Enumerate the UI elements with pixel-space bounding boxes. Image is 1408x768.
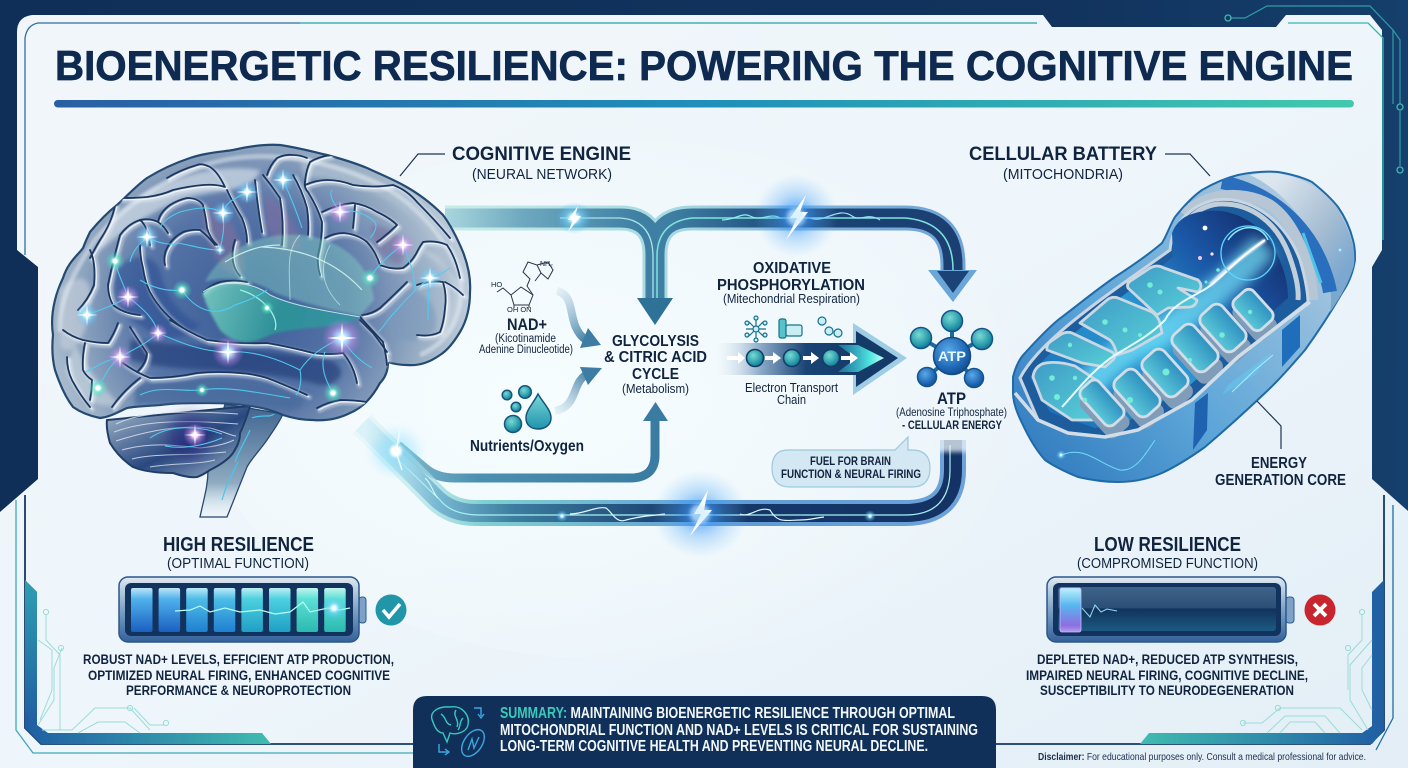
callout: fuel for brain: FUNCTION & NEURAL FIRING [781, 467, 921, 481]
cristae: side walls of fingers [1077, 293, 1280, 441]
title: BIOENERGETIC RESILIENCE: POWERING THE COGNITIVE ENGINE [55, 42, 1353, 89]
label: ATP: (Adenosine Triphosphate) [896, 405, 1007, 419]
label: ATP: ATP [937, 389, 966, 408]
icon: ATP molecule: ATP [938, 348, 966, 364]
label: electron transport chain: Chain [777, 393, 806, 407]
label: ATP [896, 389, 1007, 432]
label: oxidative phosphorylation: PHOSPHORYLATION [717, 277, 865, 294]
callout: cognitive engine: (NEURAL NETWORK) [472, 166, 612, 183]
cap band [1222, 182, 1330, 292]
inner rim highlight [60, 156, 461, 355]
mitochondrion [1013, 172, 1355, 482]
label: electron transport chain [745, 381, 838, 407]
cerebellum [107, 406, 250, 477]
text: low resilience effects: DEPLETED NAD+, REDUCED ATP SYNTHESIS, [1037, 652, 1298, 667]
callout: cognitive engine [400, 144, 631, 183]
arrow: electron transport chain [718, 323, 907, 395]
callout: fuel for brain [772, 437, 930, 487]
label: NAD+: NAD+ [507, 315, 547, 334]
text: low resilience effects [1026, 652, 1308, 698]
silver collar inner [1178, 204, 1298, 300]
callout: energy generation core: GENERATION CORE [1215, 472, 1346, 489]
heading: low resilience: LOW RESILIENCE [1094, 534, 1241, 556]
icons: respiratory complexes [745, 316, 842, 342]
matrix dots [1049, 268, 1252, 403]
panel: low resilience [1026, 534, 1336, 698]
label: ATP: - CELLULAR ENERGY [902, 418, 1002, 432]
shell glow lines [1062, 440, 1155, 470]
callout: cellular battery: CELLULAR BATTERY [969, 144, 1157, 165]
text: summary statement [500, 705, 978, 755]
title rule [54, 100, 1354, 108]
label: NAD+ [479, 315, 573, 356]
sulci thin highlights [65, 157, 465, 410]
label: glycolysis & citric acid cycle [604, 333, 707, 396]
panel: high resilience [83, 534, 406, 698]
icon: NAD+ molecule: HO [491, 280, 502, 289]
limbic teal glow [203, 235, 374, 342]
label: glycolysis & citric acid cycle: GLYCOLYSIS [612, 333, 699, 350]
label: oxidative phosphorylation [717, 260, 865, 306]
icon: depleted battery [1047, 577, 1294, 642]
arrow: NAD+ to glycolysis [557, 291, 601, 348]
outer membrane [1013, 172, 1355, 482]
neural sparkles [75, 168, 442, 403]
label: electron transport chain: Electron Transport [745, 381, 838, 395]
dark ring around opening [1020, 199, 1308, 437]
icon: NAD+ molecule: OH ON [507, 305, 532, 314]
label: glycolysis & citric acid cycle: CYCLE [632, 366, 679, 383]
label: NAD+: (Kicotinamide [495, 333, 556, 345]
text: summary statement: MITOCHONDRIAL FUNCTION AND NAD+ LEVELS IS CRITICAL FOR SUSTAINING [500, 722, 978, 739]
callout: energy generation core [1215, 401, 1346, 489]
subheading: compromised function: (COMPROMISED FUNCTION) [1077, 555, 1258, 572]
pipe: metabolism feed from brain to glycolysis [398, 402, 668, 478]
callout: cellular battery [969, 144, 1210, 183]
matrix glow [1072, 245, 1265, 405]
rim highlight [1015, 302, 1310, 437]
text: low resilience effects: IMPAIRED NEURAL FIRING, COGNITIVE DECLINE, [1026, 668, 1308, 683]
cristae: fingers [1077, 286, 1276, 429]
label: glycolysis & citric acid cycle: & CITRIC ACID [604, 349, 707, 366]
silver collar [1185, 195, 1313, 300]
callout: fuel for brain: FUEL FOR BRAIN [810, 454, 891, 468]
icon: brain and mitochondrion cycle [432, 707, 489, 760]
energy arcs [1062, 240, 1265, 407]
glass end cap [1250, 173, 1354, 312]
heading: high resilience: HIGH RESILIENCE [163, 534, 314, 556]
brain stem [200, 404, 283, 517]
text: summary statement: SUMMARY: MAINTAINING BIOENERGETIC RESILIENCE THROUGH OPTIMAL [500, 705, 955, 722]
arrow: nutrients to glycolysis [555, 367, 602, 411]
text: high resilience effects [83, 652, 394, 698]
label: nutrients/oxygen: Nutrients/Oxygen [470, 438, 584, 455]
label: NAD+: Adenine Dinucleotide) [479, 344, 573, 356]
subheading: optimal function: (OPTIMAL FUNCTION) [167, 555, 309, 572]
callout: cognitive engine: COGNITIVE ENGINE [452, 144, 631, 165]
text: summary statement: LONG-TERM COGNITIVE HEALTH AND PREVENTING NEURAL DECLINE. [500, 738, 928, 755]
text: high resilience effects: OPTIMIZED NEURAL FIRING, ENHANCED COGNITIVE [88, 668, 390, 683]
icon: NAD+ molecule: NH₂ [540, 261, 553, 268]
icon: nutrients and oxygen droplets [502, 386, 551, 432]
neural lines [85, 180, 450, 398]
cortical shading [60, 155, 466, 410]
icon: NAD+ molecule [491, 261, 553, 314]
brain [52, 145, 470, 517]
cristae: upper chambers [1033, 266, 1201, 420]
label: glycolysis & citric acid cycle: (Metabolism) [622, 381, 689, 396]
label: oxidative phosphorylation: (Mitechondrial Respiration) [723, 292, 860, 306]
pipe: ATP fuel returning to brain (bottom) [362, 424, 970, 521]
text: low resilience effects: SUSCEPTIBILITY TO NEURODEGENERATION [1040, 683, 1294, 698]
sulci soft highlights [66, 157, 466, 410]
pipe: brain to glycolysis and ATP (top) [445, 213, 977, 325]
icon: cross badge [1304, 594, 1336, 626]
icon: check badge [376, 594, 406, 626]
energy sparks on pipes [374, 174, 876, 558]
text: high resilience effects: PERFORMANCE & NEUROPROTECTION [126, 683, 351, 698]
callout: energy generation core: ENERGY [1251, 455, 1308, 472]
cut-away opening [1030, 211, 1288, 428]
icon: ATP molecule [910, 310, 992, 388]
sulci grooves [63, 155, 463, 408]
panel: summary [413, 696, 996, 768]
lower shell bands [1282, 315, 1300, 367]
callout: cellular battery: (MITOCHONDRIA) [1003, 166, 1123, 183]
label: oxidative phosphorylation: OXIDATIVE [753, 260, 831, 277]
text: high resilience effects: ROBUST NAD+ LEVELS, EFFICIENT ATP PRODUCTION, [83, 652, 394, 667]
icon: full battery [119, 577, 366, 642]
cerebrum silhouette [52, 145, 470, 420]
